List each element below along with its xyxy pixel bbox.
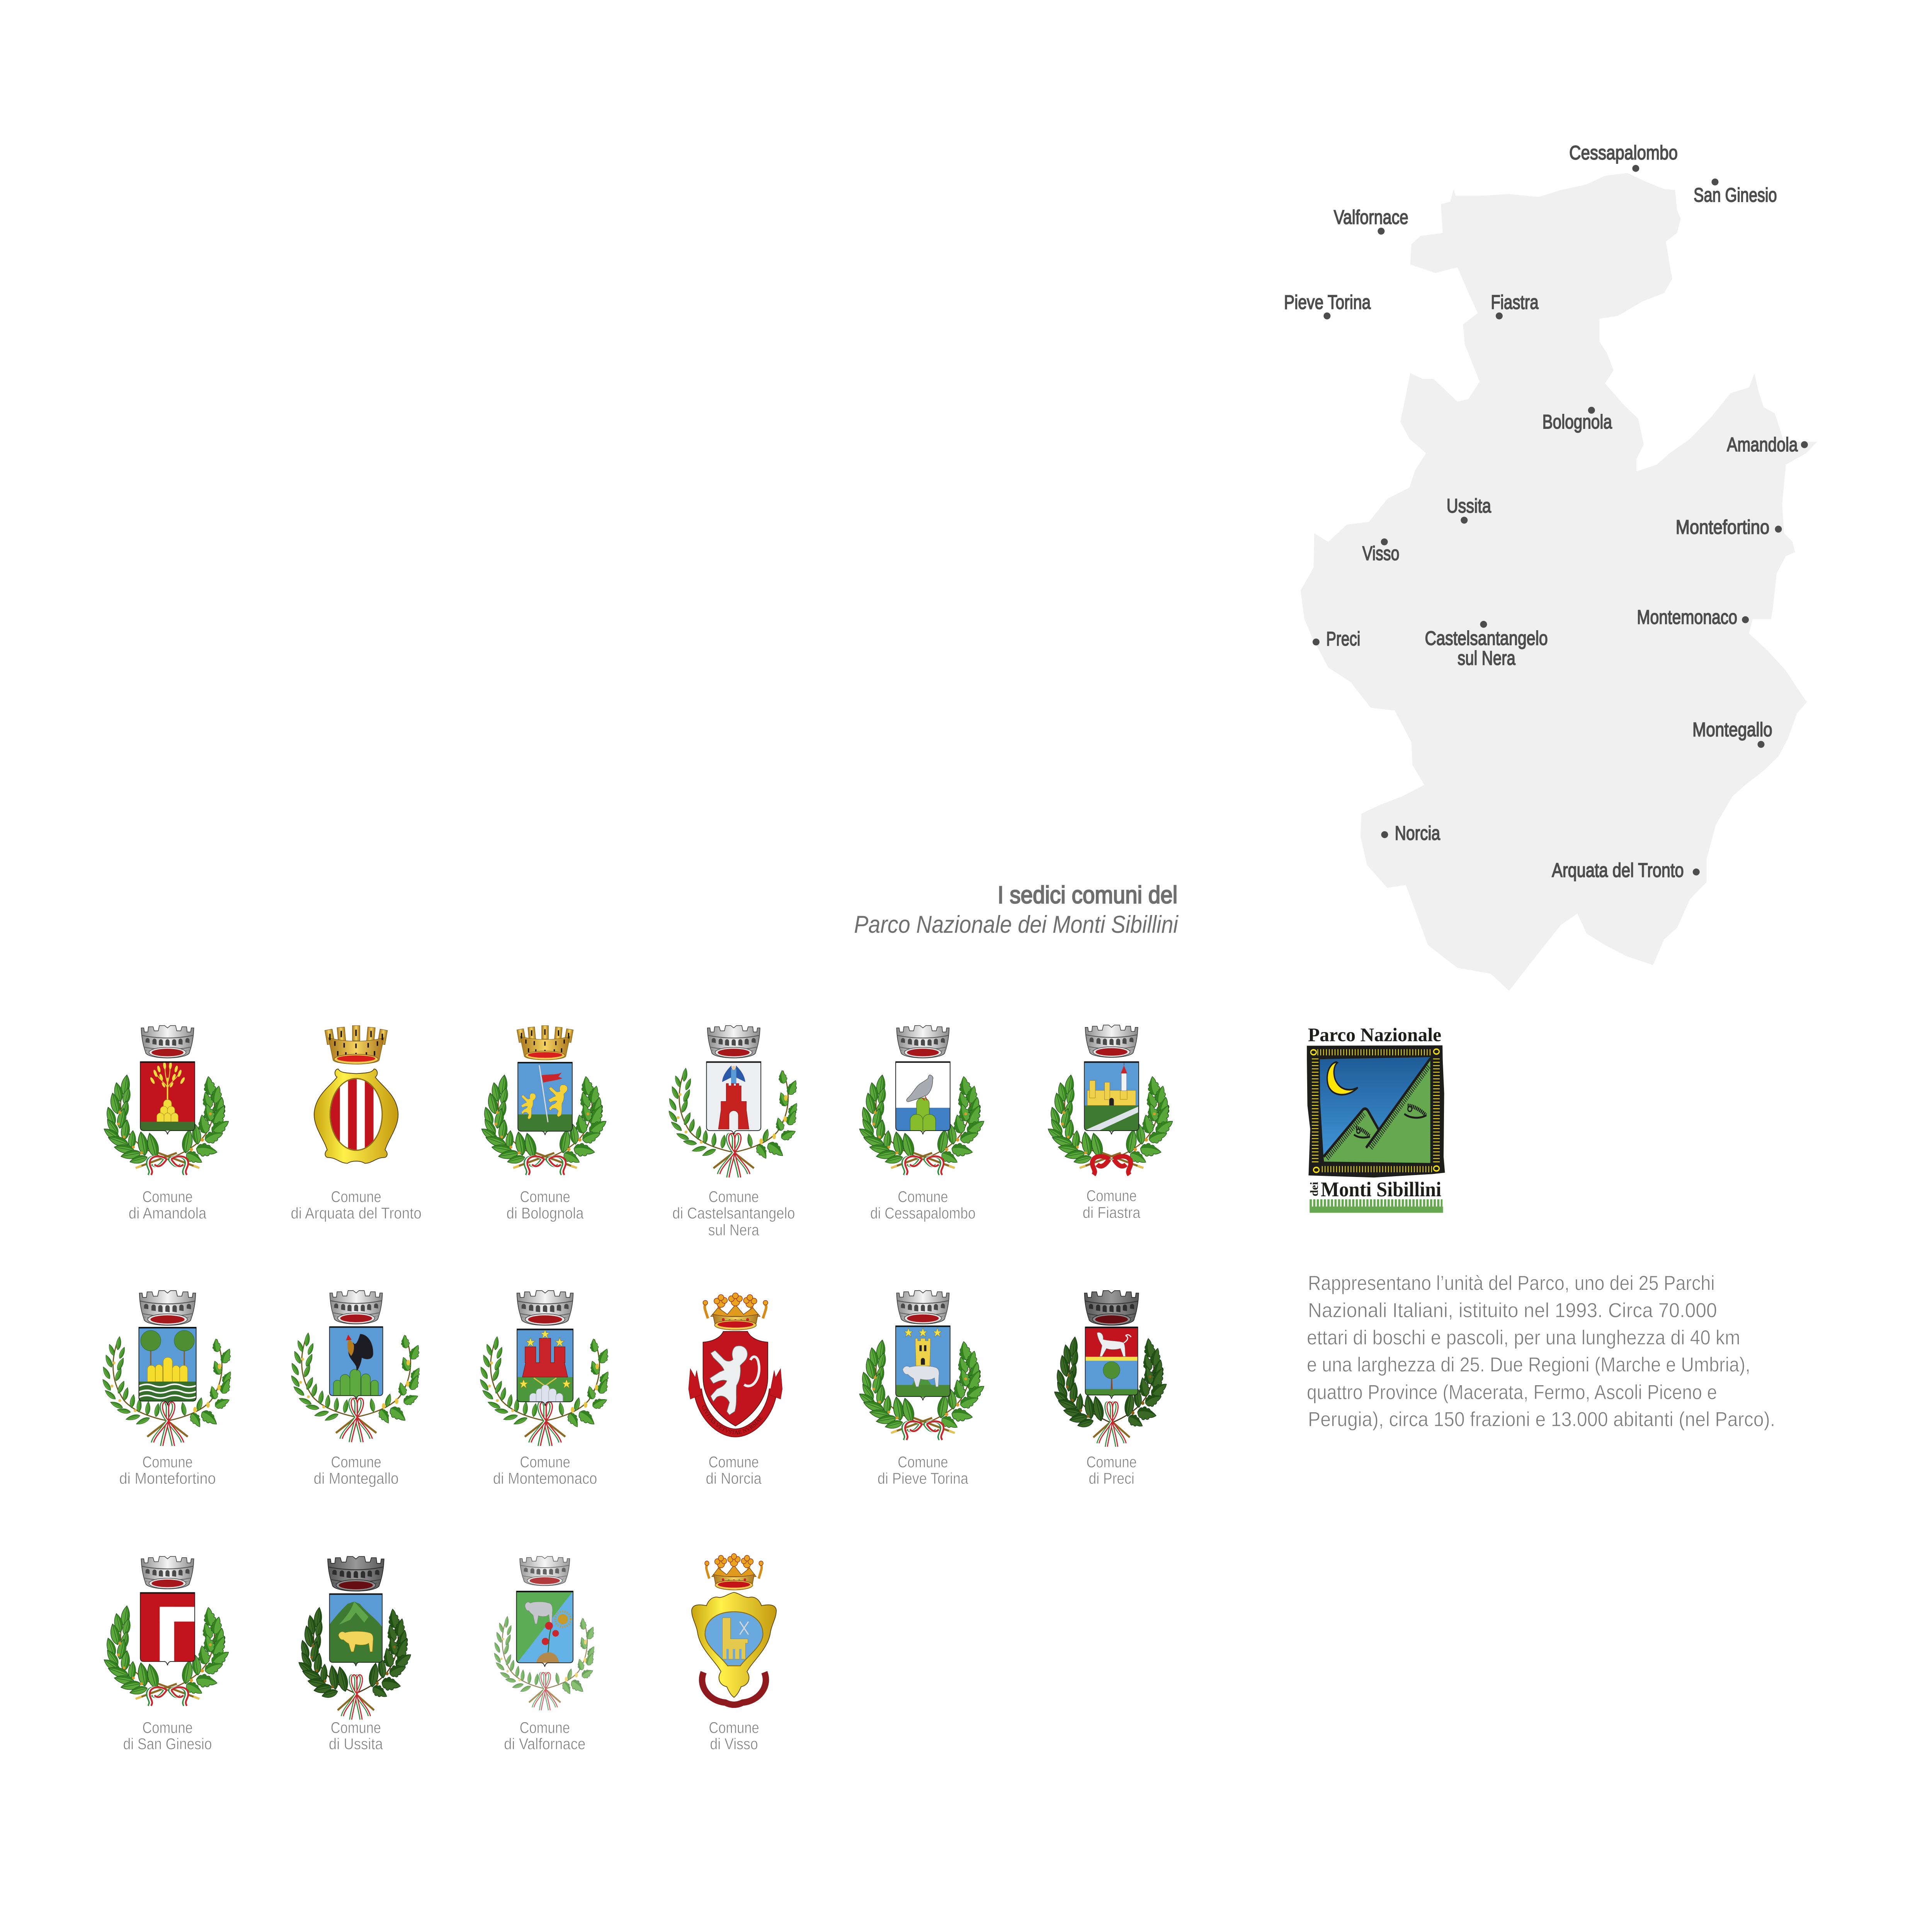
map panel: territory of the park xyxy=(1284,142,1817,991)
logo rotated dei: dei xyxy=(1308,1182,1320,1196)
wreath xyxy=(857,1339,988,1440)
map labels: Norcia xyxy=(1395,822,1440,844)
caption xyxy=(507,1188,584,1222)
shield xyxy=(140,1593,195,1665)
caption: di San Ginesio xyxy=(123,1735,212,1753)
caption: Comune xyxy=(898,1453,948,1471)
caption xyxy=(119,1453,216,1487)
crown xyxy=(517,1291,573,1325)
crest: Castelsantangelo sul Nera xyxy=(667,1026,800,1239)
description text: Perugia), circa 150 frazioni e 13.000 abitanti (nel Parco). xyxy=(1308,1408,1775,1431)
wreath xyxy=(297,1607,414,1719)
caption: di Fiastra xyxy=(1083,1204,1141,1221)
map labels: Montefortino xyxy=(1676,516,1769,538)
caption: di Castelsantangelo xyxy=(672,1204,795,1222)
shield xyxy=(1084,1058,1139,1134)
description text: quattro Province (Macerata, Fermo, Ascoli Piceno e xyxy=(1307,1381,1717,1404)
crest: Visso xyxy=(692,1554,776,1753)
map labels: Preci xyxy=(1326,628,1361,650)
caption xyxy=(129,1188,206,1222)
caption: di Valfornace xyxy=(504,1735,585,1753)
crown xyxy=(896,1026,949,1058)
shield xyxy=(140,1062,195,1134)
caption: di Visso xyxy=(710,1735,758,1753)
caption: Comune xyxy=(331,1719,381,1736)
shield xyxy=(706,1062,761,1134)
title: Parco Nazionale dei Monti Sibillini xyxy=(854,911,1179,938)
crest: Arquata del Tronto xyxy=(291,1026,422,1222)
map labels: Ussita xyxy=(1447,495,1491,517)
crest: Cessapalombo xyxy=(857,1026,988,1222)
caption xyxy=(504,1719,585,1753)
title: I sedici comuni del xyxy=(998,882,1177,909)
map shape xyxy=(1301,173,1817,991)
map labels: Pieve Torina xyxy=(1284,291,1371,313)
title xyxy=(854,882,1179,938)
caption xyxy=(329,1719,383,1753)
wreath xyxy=(102,1074,232,1175)
caption xyxy=(709,1719,759,1753)
wreath xyxy=(1046,1074,1176,1175)
caption: di Arquata del Tronto xyxy=(291,1204,422,1222)
shield with lion xyxy=(703,1332,768,1426)
map dots xyxy=(1313,165,1808,876)
crest: San Ginesio xyxy=(102,1556,232,1753)
caption xyxy=(123,1719,212,1753)
logo emblem xyxy=(1307,1045,1445,1213)
wreath xyxy=(1053,1336,1170,1447)
caption: Comune xyxy=(898,1188,948,1206)
caption xyxy=(870,1188,976,1222)
map labels: Visso xyxy=(1362,543,1400,565)
shield xyxy=(896,1326,950,1400)
caption xyxy=(1086,1453,1137,1487)
map labels: San Ginesio xyxy=(1694,184,1777,206)
caption: Comune xyxy=(142,1453,193,1471)
caption: di Pieve Torina xyxy=(878,1469,968,1487)
crest: Ussita xyxy=(297,1556,414,1753)
shield xyxy=(330,1327,383,1401)
logo top text: Parco Nazionale xyxy=(1308,1024,1441,1046)
shield xyxy=(517,1329,573,1408)
caption xyxy=(291,1188,422,1222)
caption: di Cessapalombo xyxy=(870,1204,976,1222)
crown xyxy=(705,1554,763,1590)
crest: Bolognola xyxy=(480,1026,610,1222)
caption: Comune xyxy=(1086,1187,1137,1205)
caption xyxy=(1083,1187,1141,1221)
caption xyxy=(878,1453,968,1487)
map labels: Fiastra xyxy=(1491,291,1539,313)
map labels: Montemonaco xyxy=(1637,606,1737,628)
caption xyxy=(314,1453,399,1487)
description text: ettari di boschi e pascoli, per una lunghezza di 40 km xyxy=(1307,1327,1740,1349)
wreath xyxy=(857,1074,988,1175)
crown xyxy=(517,1026,573,1060)
wreath xyxy=(493,1616,597,1710)
crest: Pieve Torina xyxy=(857,1291,988,1487)
description text: e una larghezza di 25. Due Regioni (Marche e Umbria), xyxy=(1307,1354,1750,1376)
shield xyxy=(330,1594,382,1666)
crest: Norcia xyxy=(689,1293,782,1487)
caption: di Preci xyxy=(1088,1469,1134,1487)
caption: di Norcia xyxy=(706,1469,762,1487)
caption: di Ussita xyxy=(329,1735,383,1753)
shield xyxy=(1085,1327,1138,1399)
map labels: Valfornace xyxy=(1334,206,1408,228)
shield xyxy=(139,1327,196,1405)
crest: Fiastra xyxy=(1046,1025,1176,1221)
caption xyxy=(672,1188,795,1239)
logo: Parco Nazionale dei Monti Sibillini xyxy=(1307,1024,1445,1213)
wreath xyxy=(102,1605,232,1706)
cartouche xyxy=(692,1592,776,1697)
caption: di Montefortino xyxy=(119,1469,216,1487)
caption: di Bolognola xyxy=(507,1204,584,1222)
crest: Montemonaco xyxy=(478,1291,612,1487)
wreath xyxy=(480,1074,610,1175)
caption xyxy=(706,1453,762,1487)
wreath xyxy=(478,1336,612,1446)
caption: Comune xyxy=(709,1453,759,1471)
caption: Comune xyxy=(1086,1453,1137,1471)
crown xyxy=(707,1026,760,1058)
crown xyxy=(520,1556,570,1586)
crown xyxy=(330,1291,383,1324)
cartouche with stripes xyxy=(314,1069,398,1163)
caption: di Montegallo xyxy=(314,1469,399,1487)
caption: di Montemonaco xyxy=(493,1469,597,1487)
caption: di Amandola xyxy=(129,1204,206,1222)
caption: Comune xyxy=(331,1188,381,1206)
ribbon with motto: CIVITAS VETVSTAE NVRSIAE xyxy=(700,1404,764,1436)
crown xyxy=(1084,1291,1139,1325)
wreath xyxy=(101,1336,234,1446)
caption: Comune xyxy=(520,1453,570,1471)
map labels: Montegallo xyxy=(1692,719,1772,741)
caption xyxy=(493,1453,597,1487)
map labels: Castelsantangelo xyxy=(1425,627,1548,649)
map labels: Cessapalombo xyxy=(1569,142,1678,164)
ribbon xyxy=(702,1672,766,1705)
crest: Amandola xyxy=(102,1026,232,1222)
caption: Comune xyxy=(142,1188,193,1206)
crown xyxy=(896,1291,949,1324)
shield xyxy=(518,1062,572,1135)
crest: Montegallo xyxy=(289,1291,423,1487)
map labels: Arquata del Tronto xyxy=(1552,859,1684,881)
description text: Nazionali Italiani, istituito nel 1993. Circa 70.000 xyxy=(1308,1299,1717,1322)
crest: Montefortino xyxy=(101,1291,234,1487)
crest: Valfornace xyxy=(493,1556,597,1753)
crown xyxy=(141,1026,194,1058)
caption: sul Nera xyxy=(708,1221,759,1239)
caption: Comune xyxy=(709,1188,759,1206)
wreath xyxy=(667,1068,800,1177)
map labels: sul Nera xyxy=(1458,647,1515,669)
shield xyxy=(896,1062,950,1135)
crest: Preci xyxy=(1053,1291,1170,1487)
crown xyxy=(703,1293,768,1330)
caption: Comune xyxy=(709,1719,759,1736)
crown xyxy=(1085,1025,1138,1058)
crown xyxy=(141,1556,194,1589)
description text xyxy=(1307,1272,1775,1431)
crown xyxy=(325,1026,388,1064)
wreath xyxy=(289,1332,423,1442)
caption: Comune xyxy=(331,1453,381,1471)
logo bottom text: Monti Sibillini xyxy=(1321,1178,1441,1201)
caption: Comune xyxy=(142,1719,193,1736)
caption: Comune xyxy=(520,1188,570,1206)
ribbon with motto xyxy=(689,1369,782,1436)
shield xyxy=(517,1591,573,1667)
map labels xyxy=(1284,142,1798,881)
crown xyxy=(139,1291,196,1325)
description text: Rappresentano l’unità del Parco, uno dei 25 Parchi xyxy=(1308,1272,1715,1295)
map labels: Amandola xyxy=(1727,434,1798,456)
caption: Comune xyxy=(520,1719,570,1736)
map labels: Bolognola xyxy=(1542,411,1612,433)
crown xyxy=(328,1556,384,1591)
